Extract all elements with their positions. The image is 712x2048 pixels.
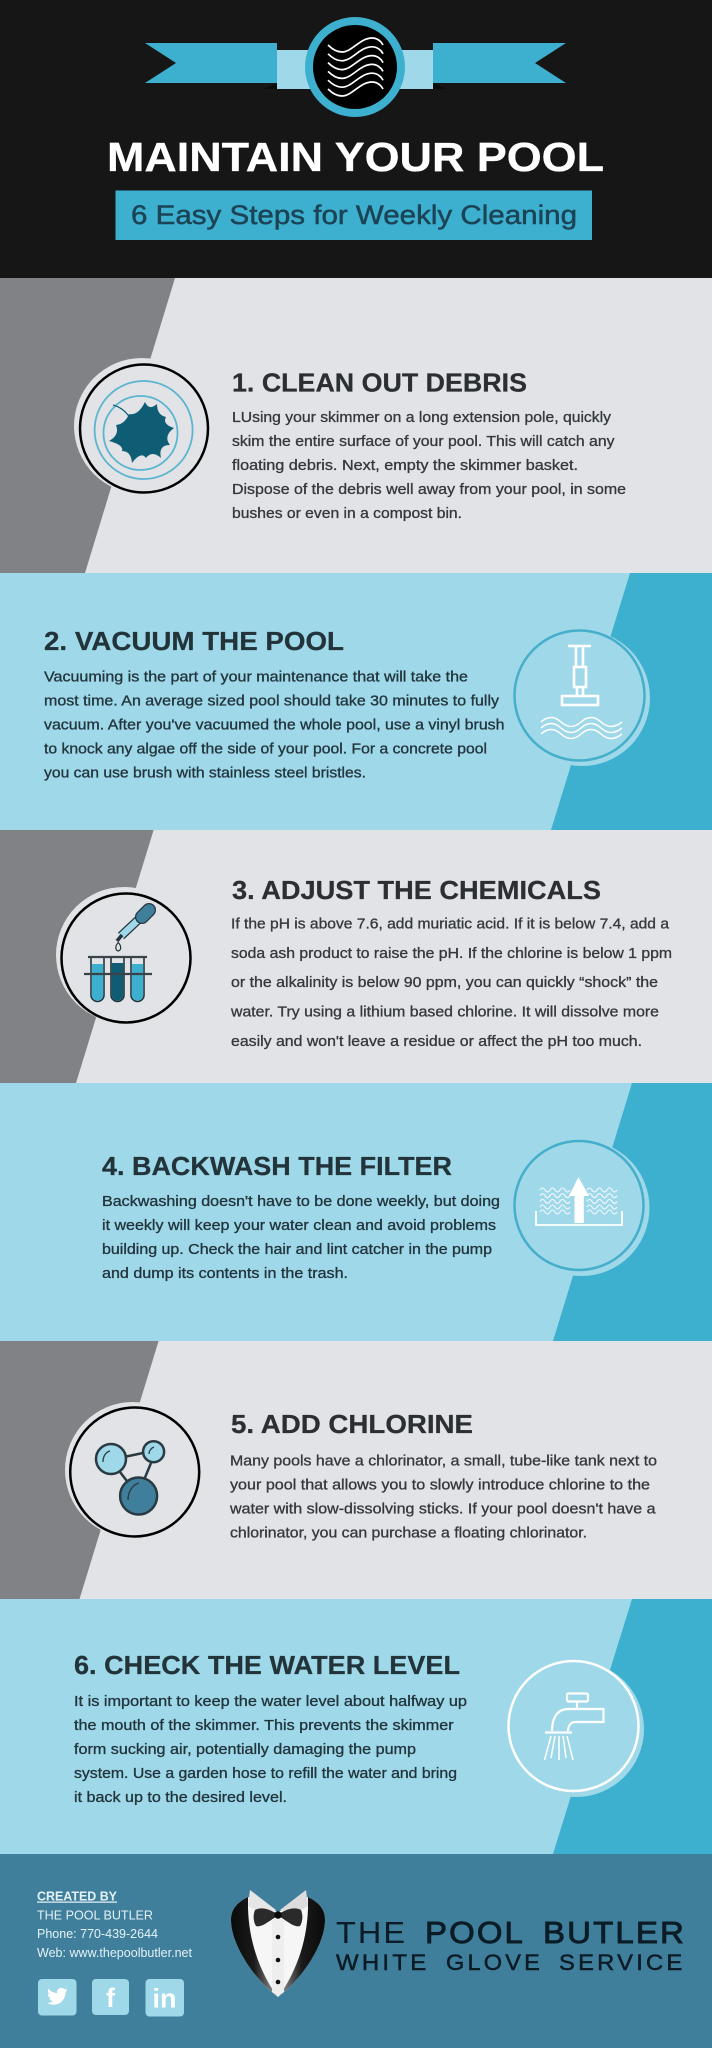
text block: step 1: floating debris. Next, empty the skimmer basket. [232, 458, 578, 474]
icon: backwash arrow [514, 1140, 650, 1276]
text block: step 6: It is important to keep the water level about halfway up [74, 1694, 467, 1710]
text block: step 1: skim the entire surface of your pool. This will catch any [232, 434, 615, 450]
text block: step 1: Dispose of the debris well away from your pool, in some [232, 482, 626, 498]
icon: linkedin: in [152, 1984, 176, 2014]
contact details: THE POOL BUTLER [37, 1908, 153, 1922]
text block: step 5: water with slow-dissolving sticks. If your pool doesn't have a [229, 1502, 657, 1518]
logo wordmark: THE [336, 1915, 407, 1950]
icon: pool vacuum [514, 630, 650, 766]
ribbon banner [145, 43, 566, 89]
icon: facebook: f [106, 1983, 116, 2013]
contact details: CREATED BY [37, 1890, 118, 1904]
icon: skimmer leaf [74, 358, 210, 494]
text block: step 3: or the alkalinity is below 90 ppm, you can quickly “shock” the [231, 975, 658, 991]
icon: twitter [38, 1979, 76, 2016]
text block: step 4: building up. Check the hair and lint catcher in the pump [102, 1242, 492, 1258]
subtitle banner: 6 Easy Steps for Weekly Cleaning [131, 200, 577, 230]
contact details: Phone: 770-439-2644 [37, 1927, 158, 1941]
icon: chlorine molecule [65, 1402, 201, 1538]
logo badge: waves [305, 17, 405, 117]
panel: step 6 check the water level [0, 1599, 712, 1854]
panel: footer [0, 1854, 712, 2048]
panel: step 3 adjust the chemicals [0, 830, 712, 1083]
heading: step 5: 5. ADD CHLORINE [231, 1409, 473, 1439]
text block: step 4: it weekly will keep your water clean and avoid problems [102, 1218, 496, 1234]
header panel [0, 0, 712, 278]
icon: dropper and test tubes [56, 887, 192, 1023]
text block: step 4: Backwashing doesn't have to be done weekly, but doing [102, 1194, 500, 1210]
text block: step 3: easily and won't leave a residue or affect the pH too much. [231, 1034, 642, 1050]
icon: water faucet [508, 1661, 644, 1797]
text block: step 1 [232, 410, 626, 522]
text block: step 6: form sucking air, potentially damaging the pump [74, 1742, 416, 1758]
panel: step 4 backwash the filter [0, 1083, 712, 1341]
text block: step 2: Vacuuming is the part of your maintenance that will take the [44, 670, 468, 686]
text block: step 1: LUsing your skimmer on a long extension pole, quickly [232, 410, 612, 426]
panel: step 2 vacuum the pool [0, 573, 712, 830]
text block: step 6: it back up to the desired level. [74, 1790, 287, 1806]
subtitle banner [116, 190, 592, 240]
text block: step 2: vacuum. After you've vacuumed the whole pool, use a vinyl brush [44, 718, 504, 734]
logo wordmark: BUTLER [543, 1915, 686, 1950]
text block: step 2: most time. An average sized pool should take 30 minutes to fully [44, 694, 500, 710]
text block: step 3: soda ash product to raise the pH. If the chlorine is below 1 ppm [231, 946, 672, 962]
text block: step 2: to knock any algae off the side of your pool. For a concrete pool [44, 742, 487, 758]
contact details [37, 1890, 193, 1960]
logo wordmark: SERVICE [559, 1950, 686, 1975]
logo: tuxedo [231, 1890, 325, 1997]
contact details: Web: www.thepoolbutler.net [37, 1946, 193, 1960]
text block: step 5: Many pools have a chlorinator, a small, tube-like tank next to [230, 1454, 657, 1470]
title: MAINTAIN YOUR POOL [107, 134, 604, 180]
heading: step 4: 4. BACKWASH THE FILTER [102, 1151, 452, 1181]
logo wordmark: GLOVE [446, 1950, 543, 1975]
heading: step 3: 3. ADJUST THE CHEMICALS [232, 875, 601, 905]
logo wordmark [336, 1915, 686, 1975]
text block: step 4 [102, 1194, 500, 1282]
text block: step 3: If the pH is above 7.6, add muriatic acid. If it is below 7.4, add a [231, 916, 670, 932]
heading: step 6: 6. CHECK THE WATER LEVEL [74, 1650, 460, 1680]
text block: step 6: the mouth of the skimmer. This prevents the skimmer [74, 1718, 454, 1734]
text block: step 3 [230, 916, 672, 1050]
text block: step 5: chlorinator, you can purchase a floating chlorinator. [230, 1526, 587, 1542]
text block: step 4: and dump its contents in the trash. [102, 1266, 348, 1282]
text block: step 1: bushes or even in a compost bin. [232, 506, 462, 522]
logo wordmark: POOL [425, 1915, 525, 1950]
text block: step 6: system. Use a garden hose to refill the water and bring [74, 1766, 457, 1782]
text block: step 2: you can use brush with stainless steel bristles. [44, 766, 366, 782]
logo wordmark: WHITE [336, 1950, 430, 1975]
text block: step 5: your pool that allows you to slowly introduce chlorine to the [230, 1478, 650, 1494]
panel: step 1 clean out debris [0, 278, 712, 573]
text block: step 5 [229, 1454, 657, 1542]
text block: step 3: water. Try using a lithium based chlorine. It will dissolve more [230, 1004, 659, 1020]
heading: step 1: 1. CLEAN OUT DEBRIS [232, 368, 527, 398]
panel: step 5 add chlorine [0, 1341, 712, 1599]
text block: step 6 [74, 1694, 467, 1806]
icon: linkedin [146, 1979, 184, 2016]
icon: facebook [92, 1979, 129, 2015]
text block: step 2 [44, 670, 504, 782]
heading: step 2: 2. VACUUM THE POOL [44, 626, 344, 656]
